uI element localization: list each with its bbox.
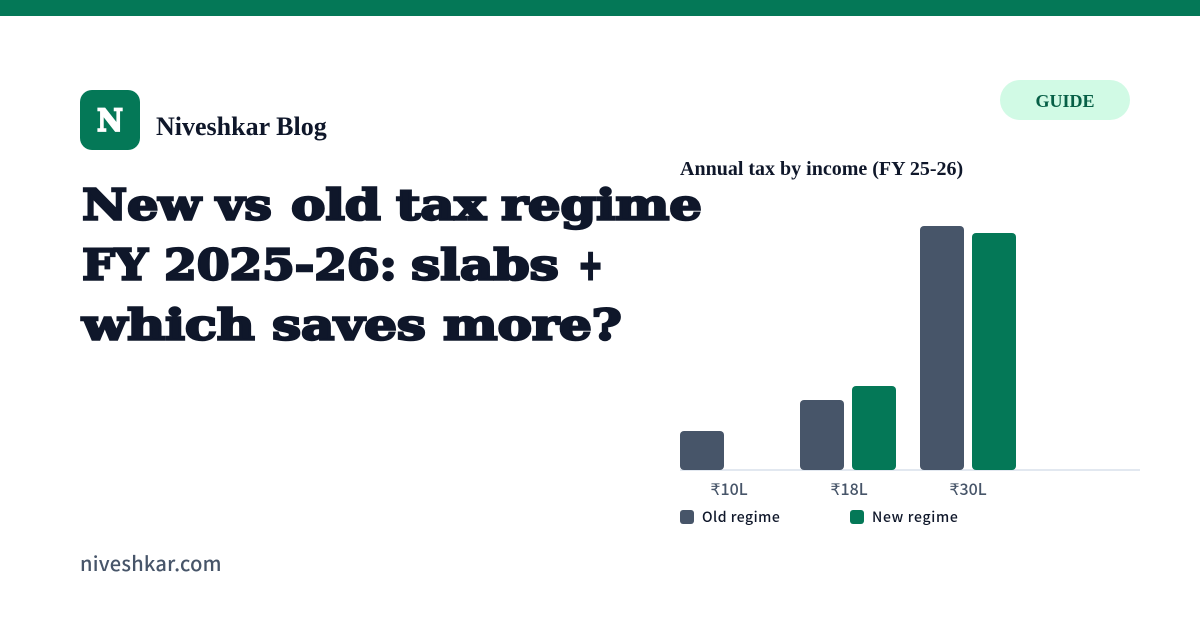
bar: old regime 10L (680, 431, 724, 470)
headline: tax (396, 180, 487, 230)
axis label 30L: ₹30L (949, 476, 987, 500)
brand name: Niveshkar Blog (156, 112, 327, 141)
bar: old regime 30L (920, 226, 964, 470)
legend swatch old (680, 510, 694, 524)
bar: old regime 18L (800, 400, 844, 470)
logo badge: N (97, 103, 123, 139)
logo badge (80, 90, 140, 150)
headline (80, 180, 702, 350)
axis baseline (680, 469, 1140, 471)
headline: more? (443, 300, 622, 350)
headline: old (291, 180, 381, 230)
top accent bar (0, 0, 1200, 16)
bar: new regime 18L (852, 386, 896, 470)
headline: vs (215, 180, 272, 230)
headline: FY (82, 240, 149, 290)
headline: regime (501, 180, 702, 230)
chart title: Annual tax by income (FY 25-26) (680, 158, 963, 180)
headline: + (578, 240, 603, 290)
headline: saves (272, 300, 426, 350)
guide tag: GUIDE (1035, 91, 1094, 111)
bar: new regime 30L (972, 233, 1016, 470)
chart: annual tax by income (680, 158, 1140, 527)
site url: niveshkar.com (80, 548, 222, 577)
axis label 10L: ₹10L (710, 476, 748, 500)
headline: which (81, 300, 255, 350)
legend label new: New regime (872, 507, 959, 527)
guide tag (1000, 80, 1130, 120)
axis label 18L: ₹18L (830, 476, 868, 500)
headline: slabs (411, 240, 559, 290)
legend label old: Old regime (702, 507, 780, 527)
legend swatch new (850, 510, 864, 524)
headline: 2025-26: (164, 240, 397, 290)
headline: New (82, 180, 202, 230)
